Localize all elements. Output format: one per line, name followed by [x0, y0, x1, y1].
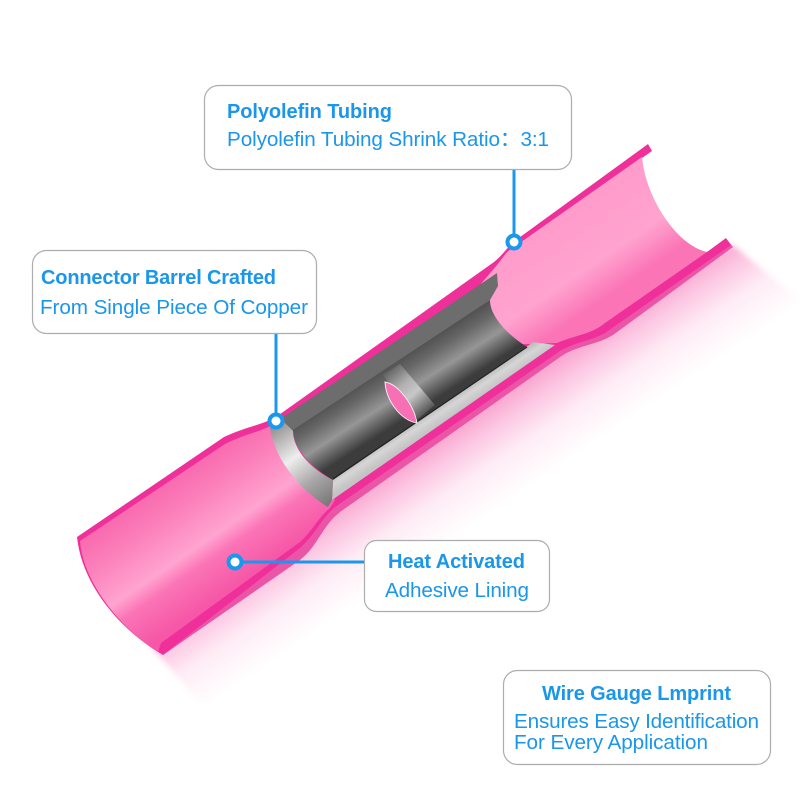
- leader line: polyolefin tubing: [508, 169, 520, 248]
- callout: connector barrel: From Single Piece Of Copper: [40, 296, 308, 319]
- leader line: connector barrel: [270, 334, 282, 428]
- barrel inner cylinder: [293, 300, 527, 480]
- upper cut face: [272, 273, 498, 431]
- lower cut face: [332, 342, 555, 500]
- callout: wire gauge imprint: For Every Application: [514, 731, 708, 754]
- callout: wire gauge imprint: Wire Gauge Lmprint: [542, 683, 731, 705]
- callout: connector barrel: Connector Barrel Crafted: [41, 267, 276, 289]
- inner pink wall, left section: [80, 425, 335, 652]
- callout: polyolefin tubing: Polyolefin Tubing Shrink Ratio：3:1: [227, 128, 549, 151]
- heat shrink connector illustration: [77, 144, 733, 655]
- tube outer underside: [160, 240, 733, 655]
- barrel end face: [270, 421, 333, 507]
- callout: wire gauge imprint: [504, 670, 770, 764]
- center ring: [383, 364, 435, 419]
- inspection hole: [385, 382, 417, 423]
- callout: heat activated: Heat Activated: [388, 551, 525, 573]
- dark seam: [333, 347, 527, 479]
- callout: wire gauge imprint: Ensures Easy Identification: [514, 710, 759, 733]
- callout: heat activated: Adhesive Lining: [385, 579, 529, 602]
- copper barrel: [270, 273, 555, 507]
- inner pink wall, right section: [480, 157, 707, 345]
- tube drop shadow: [152, 245, 800, 708]
- tube rim silhouette: [77, 144, 731, 655]
- callout: heat activated: [364, 540, 550, 612]
- callout: polyolefin tubing: Polyolefin Tubing: [227, 101, 392, 123]
- leader line: adhesive lining: [228, 556, 364, 568]
- callout: connector barrel: [32, 250, 316, 334]
- callout: polyolefin tubing: [204, 86, 572, 170]
